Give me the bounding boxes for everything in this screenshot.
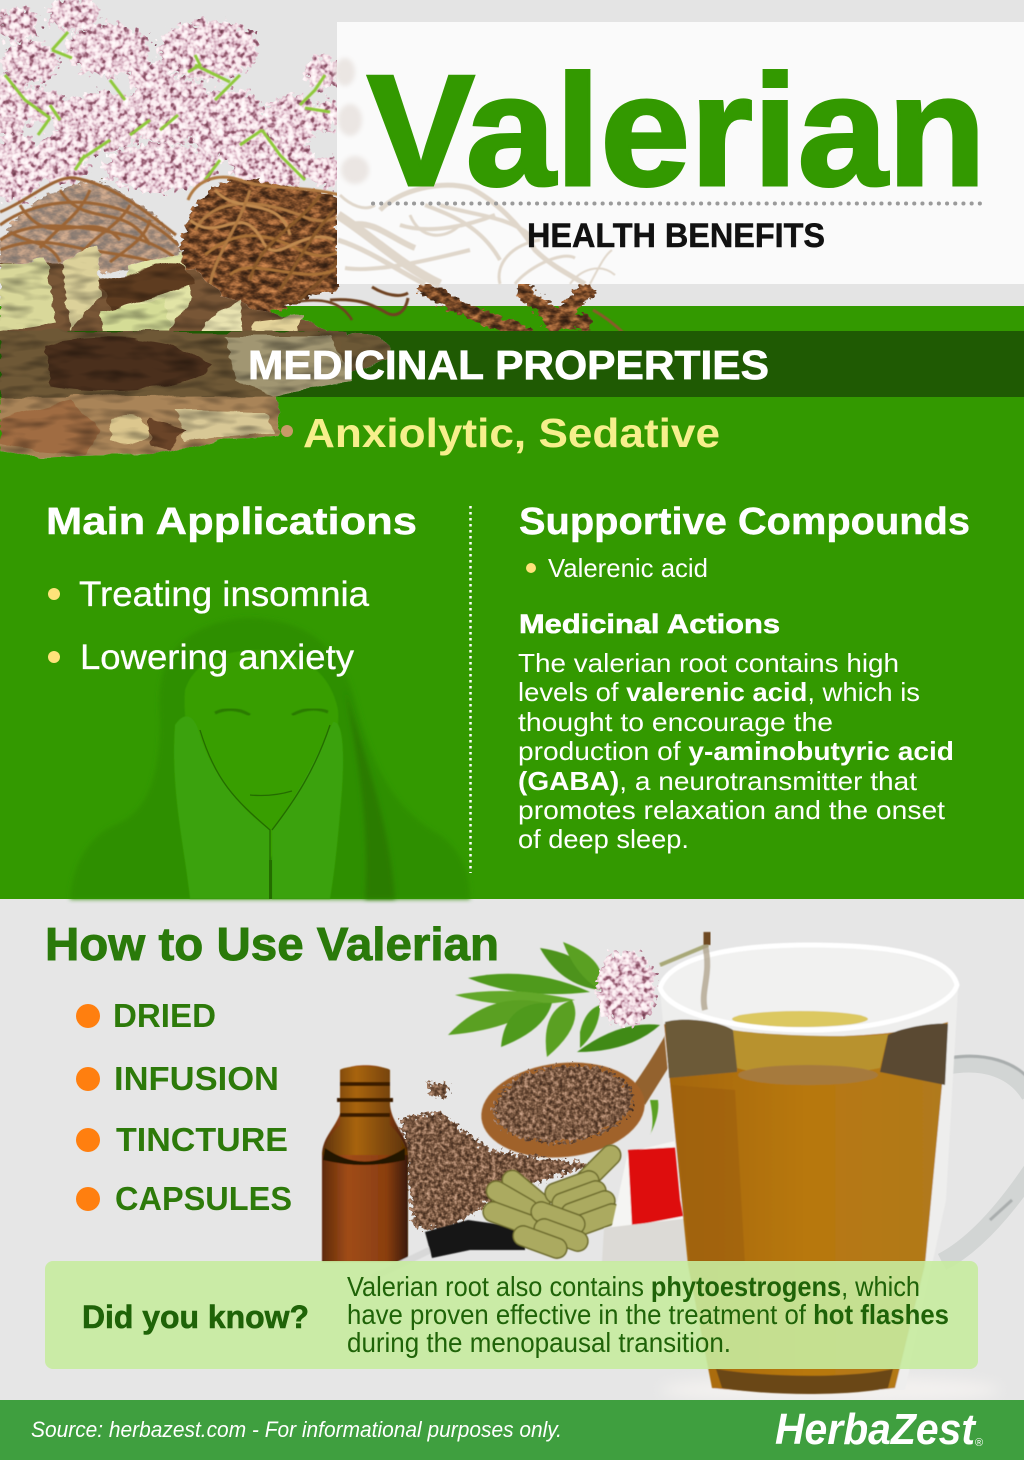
faded roots over title panel [338,185,615,284]
left tea texture [672,1085,745,1265]
base glow [660,1376,1000,1404]
hair strands [345,690,395,899]
hands [174,716,343,899]
top background [0,0,1024,306]
photo: root strands [0,177,340,300]
rim highlight [660,945,957,1030]
bullet [76,1128,100,1152]
dotted rule [373,202,985,206]
heading: medicinal properties: MEDICINAL PROPERTIES [248,342,769,388]
footer bar [0,1400,1024,1460]
callout text: have proven effective in the treatment of hot flashes [347,1299,949,1330]
bullet [48,588,60,600]
dropper cap [425,1220,525,1258]
list: forms of use [76,997,292,1217]
root seen through glass [704,945,707,1010]
handle highlights [950,1056,1024,1220]
paragraph: medicinal actions: (GABA) , a neurotransmitter that [518,766,918,796]
panel: main applications [46,501,417,677]
callout: did you know [45,1261,978,1369]
photo: flower stems [5,32,330,180]
spoon handle [630,1030,670,1105]
bullet [76,1067,100,1091]
photo: chopped root pile [0,244,345,345]
liquid line [323,1148,405,1165]
text: anxiolytic, sedative: Anxiolytic, Sedative [303,410,720,456]
heading: supportive compounds: Supportive Compounds [519,501,970,543]
callout text: during the menopausal transition. [347,1327,731,1358]
photo: small root slice [281,425,293,437]
glass right shadow [880,1024,948,1085]
photo: mug of valerian tea [660,943,1024,1404]
photo: valerian flower head [596,950,656,1026]
registered mark: ® [975,1437,983,1449]
callout text [347,1271,949,1358]
item: tincture: TINCTURE [116,1121,288,1158]
paragraph: medicinal actions: levels of valerenic acid , which is [518,677,920,707]
source note: Source: herbazest.com - For informational purposes only. [31,1417,562,1442]
photo: capsules [480,1141,625,1261]
bullet [76,1187,100,1211]
panel: supportive compounds [518,501,970,854]
hair and shoulders [70,618,470,899]
photo: loose dried root pile [400,1082,592,1232]
bullet [48,651,60,663]
paragraph: medicinal actions: promotes relaxation and the onset [518,795,946,825]
meniscus [738,1065,878,1085]
photo: stem and root top [660,932,708,965]
item: infusion: INFUSION [114,1060,279,1097]
green panel background [0,306,1024,899]
photo: tincture bottle with dropper [322,1065,525,1278]
photo: tea bag [602,1138,692,1262]
dark band behind medicinal properties [0,331,1024,397]
column divider [469,506,472,873]
face [185,650,338,870]
neck rings [337,1084,393,1115]
photo: valerian leaves [448,942,660,1135]
heading: main applications: Main Applications [46,501,417,543]
bullet [526,563,536,573]
face details [200,725,330,860]
subtitle: HEALTH BENEFITS [527,217,825,255]
item: capsules: CAPSULES [115,1180,292,1217]
paragraph: medicinal actions: of deep sleep. [518,824,689,854]
cup opening [660,946,956,1026]
callout label: Did you know? [82,1299,309,1335]
glass body [660,943,958,1390]
lower background [0,899,1024,1400]
faded flowers at panel edge [335,58,369,184]
photo: wooden spoon with dried root [477,1030,670,1165]
mug handle [942,1064,1024,1262]
application: treating insomnia: Treating insomnia [79,575,370,614]
neck shadow [269,860,272,899]
paragraph: medicinal actions: The valerian root contains high [518,648,899,678]
photo: valerian flower clusters [0,0,342,202]
callout background [45,1261,978,1369]
photo: thick roots crossing onto green [420,285,590,372]
title: Valerian [367,43,986,219]
application: lowering anxiety: Lowering anxiety [80,638,355,677]
spoon contents [489,1059,637,1149]
photo: woman with hands on face [70,618,470,899]
title panel [337,22,1024,284]
glass left shadow [665,1020,737,1078]
paragraph: medicinal actions: production of y-aminobutyric acid [518,736,954,766]
heading: medicinal actions: Medicinal Actions [519,609,780,639]
heading: how to use valerian: How to Use Valerian [45,918,499,970]
item: dried: DRIED [113,997,216,1034]
photo: root pieces in band and below [0,331,392,458]
eyes [215,709,328,715]
callout text: Valerian root also contains phytoestrogens, which [347,1271,920,1302]
spoon bowl [477,1055,649,1165]
paragraph: medicinal actions: thought to encourage the [518,707,833,737]
photo: fine roots crossing onto green [295,287,660,380]
bottle neck [322,1066,408,1155]
photo: root tangle core [178,180,338,325]
bullet [76,1004,100,1028]
tea seen through rim [732,1011,868,1027]
logo: herbazest: HerbaZest [775,1405,977,1454]
photo: left root lace [0,181,182,275]
mug base [716,1369,893,1394]
tea surface [733,1030,888,1076]
tea [664,1022,948,1392]
paragraph: medicinal actions [518,648,954,854]
compound: valerenic acid: Valerenic acid [548,553,708,583]
bottle body [322,1065,408,1262]
dropper tube [372,1250,430,1278]
